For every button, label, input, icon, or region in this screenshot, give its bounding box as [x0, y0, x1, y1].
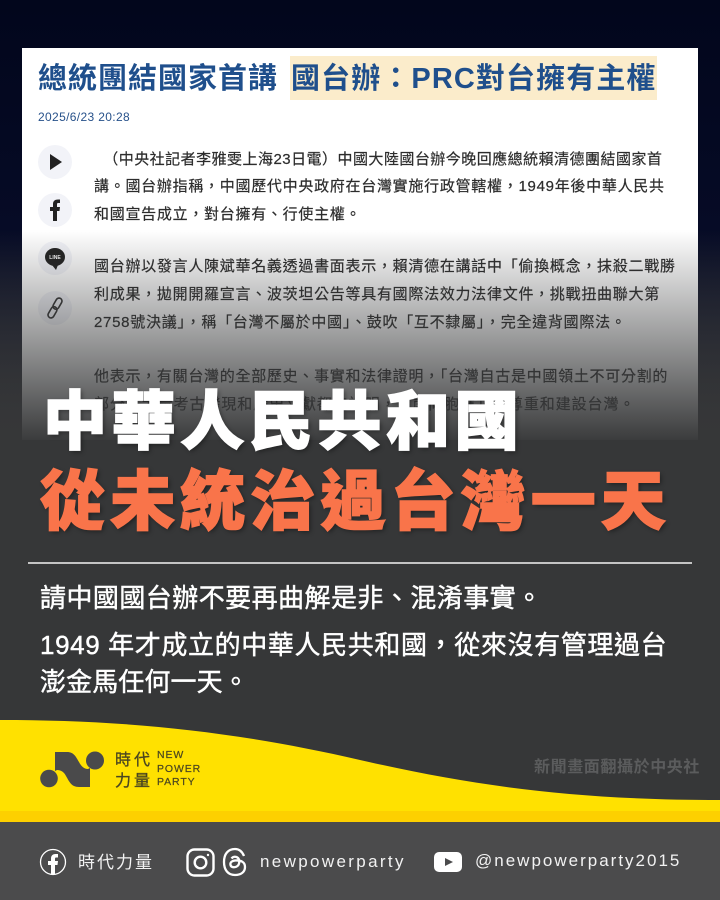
icon: line: LINE	[49, 255, 61, 261]
facebook name: 時代力量	[78, 853, 154, 872]
logo: New Power Party	[40, 749, 201, 790]
icon: youtube	[434, 852, 462, 872]
icon: play	[38, 145, 72, 179]
article paragraph 2: 國台辦以發言人陳斌華名義透過書面表示，賴清德在講話中「偷換概念，抹殺二戰勝	[94, 258, 676, 275]
panel: social footer	[0, 822, 720, 900]
article paragraph 1	[94, 151, 665, 223]
icon: facebook	[40, 848, 66, 876]
article headline highlighted part: 國台辦：PRC對台擁有主權	[291, 63, 657, 95]
article paragraph 3: 他表示，有關台灣的全部歷史、事實和法律證明，「台灣自古是中國領土不可分割的	[94, 368, 668, 385]
source credit: 新聞畫面翻攝於中央社	[534, 759, 700, 776]
logo english name: POWER	[157, 762, 201, 774]
logo english name	[157, 749, 201, 788]
divider	[28, 562, 692, 564]
title: two-line headline	[40, 386, 671, 538]
headline line 2: 從未統治過台灣一天	[40, 465, 671, 538]
icon: threads	[222, 848, 246, 876]
statement line 1: 請中國國台辦不要再曲解是非、混淆事實。	[40, 583, 543, 613]
logo mark	[40, 752, 104, 788]
statement text	[40, 583, 667, 697]
article paragraph 1: 講。國台辦指稱，中國歷代中央政府在台灣實施行政管轄權，1949年後中華人民共	[94, 178, 665, 195]
article paragraph 2: 2758號決議」，稱「台灣不屬於中國」、鼓吹「互不隸屬」，完全違背國際法。	[94, 314, 627, 331]
threads and instagram handle: newpowerparty	[260, 852, 406, 871]
icon: instagram	[186, 848, 215, 877]
article date: 2025/6/23 20:28	[38, 110, 130, 124]
article paragraph 2: 利成果，拋開開羅宣言、波茨坦公告等具有國際法效力法律文件，挑戰扭曲聯大第	[94, 286, 660, 303]
logo chinese name: 時代	[115, 752, 153, 769]
article highlight	[290, 56, 657, 100]
article paragraph 2	[94, 258, 676, 331]
logo chinese name	[115, 751, 153, 790]
article headline: 總統團結國家首講	[38, 63, 278, 95]
logo english name: NEW	[157, 749, 184, 761]
icon: facebook	[38, 193, 72, 227]
article paragraph 1: 和國宣告成立，對台擁有、行使主權。	[94, 206, 361, 223]
article paragraph 1: （中央社記者李雅雯上海23日電）中國大陸國台辦今晚回應總統賴清德團結國家首	[103, 151, 662, 168]
article paragraph 3: 部分，大量考古發現和歷史文獻都能證明，兩岸同胞應共同尊重和建設台灣。	[94, 396, 635, 413]
logo english name: PARTY	[157, 776, 196, 788]
statement line 2: 1949 年才成立的中華人民共和國，從來沒有管理過台	[40, 630, 667, 660]
icon: line	[38, 241, 72, 275]
panel: news article screenshot	[22, 48, 698, 440]
youtube handle: @newpowerparty2015	[475, 851, 681, 870]
yellow wave band	[0, 720, 720, 822]
icon: link	[38, 291, 72, 325]
article paragraph 3	[94, 368, 668, 413]
headline line 1: 中華人民共和國	[43, 386, 523, 458]
statement line 3: 澎金馬任何一天。	[40, 667, 249, 697]
logo chinese name: 力量	[115, 773, 153, 790]
